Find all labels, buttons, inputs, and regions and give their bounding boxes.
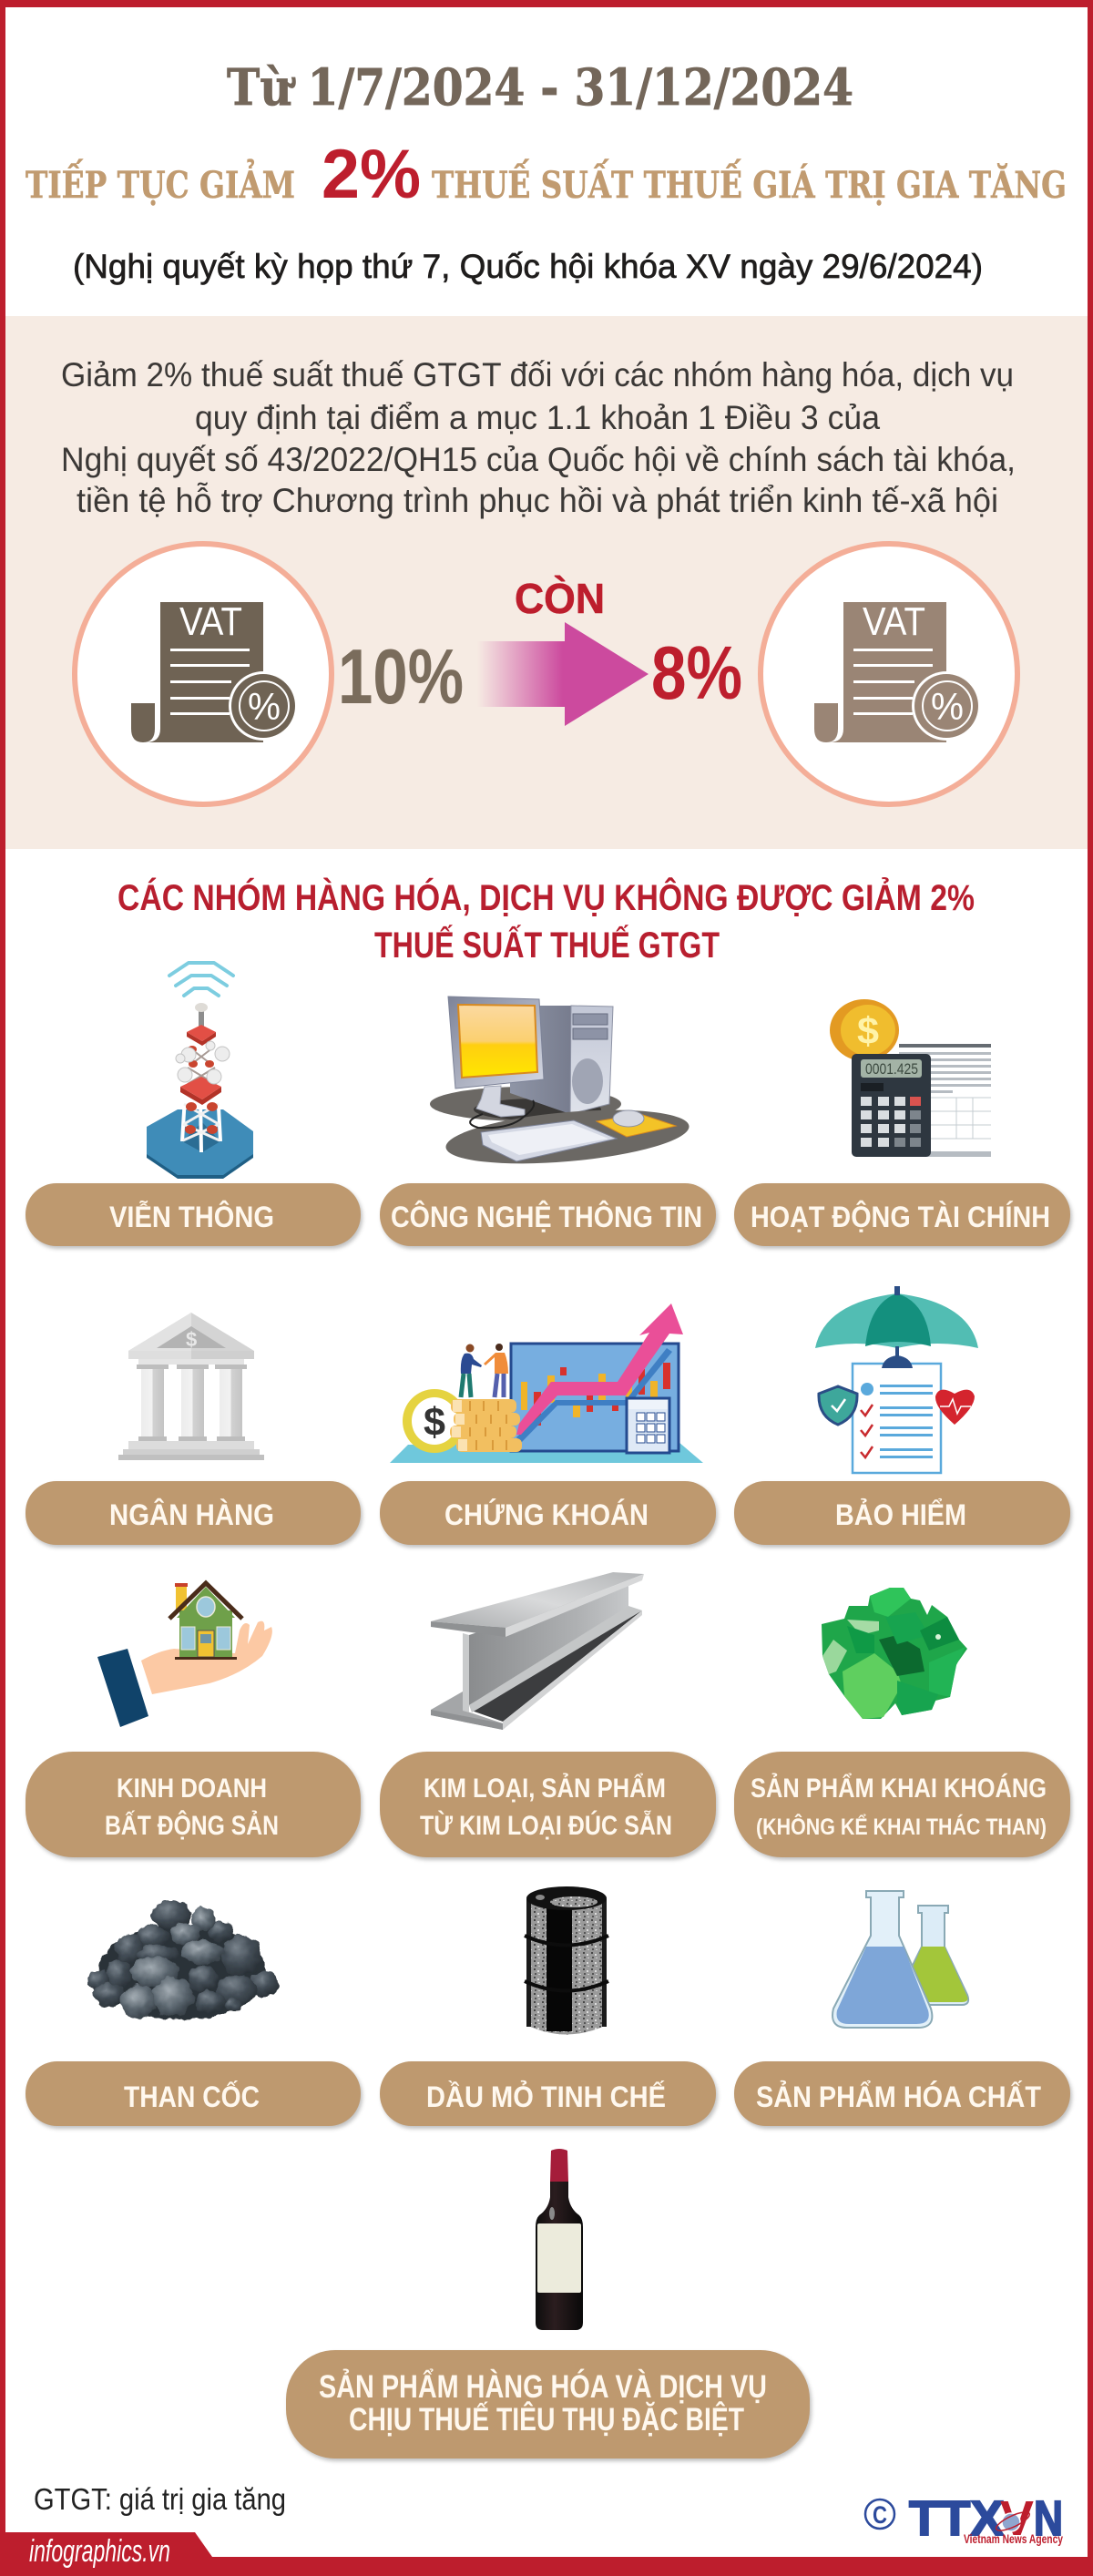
label: special consumption tax: SẢN PHẨM HÀNG HÓA VÀ DỊCH VỤ bbox=[319, 2368, 767, 2405]
footer site name: infographics.vn bbox=[29, 2534, 170, 2569]
heading: excluded groups bbox=[117, 876, 975, 966]
logo: TTXVN: N bbox=[1034, 2491, 1063, 2546]
description text: quy định tại điểm a mục 1.1 khoản 1 Điều 3 của bbox=[195, 399, 880, 436]
subtitle bbox=[26, 136, 1067, 213]
label: special consumption tax bbox=[286, 2350, 812, 2461]
footnote: GTGT: giá trị gia tăng bbox=[34, 2482, 286, 2516]
title: date range: Từ 1/7/2024 - 31/12/2024 bbox=[227, 57, 853, 117]
icon: VAT document 8%: % bbox=[931, 685, 964, 728]
icon: telecom tower bbox=[147, 963, 253, 1179]
description text bbox=[61, 356, 1016, 519]
resolution reference: (Nghị quyết kỳ họp thứ 7, Quốc hội khóa XV ngày 29/6/2024) bbox=[73, 248, 983, 285]
subtitle: 2% bbox=[322, 136, 421, 213]
label: coke bbox=[26, 2061, 363, 2129]
icon: computer bbox=[430, 997, 691, 1172]
icon: VAT document 8% bbox=[761, 544, 1017, 804]
label: mining products: SẢN PHẨM KHAI KHOÁNG bbox=[751, 1773, 1047, 1804]
label: refined oil: DẦU MỎ TINH CHẾ bbox=[426, 2080, 666, 2113]
label: banking: NGÂN HÀNG bbox=[109, 1498, 274, 1531]
icon: calculator and coin: 0001.425 bbox=[865, 1060, 918, 1078]
value: 8%: 8% bbox=[651, 630, 742, 715]
icon: oil barrel bbox=[525, 1886, 608, 2035]
label: real estate bbox=[26, 1752, 363, 1860]
label: telecom: VIỄN THÔNG bbox=[109, 1201, 274, 1233]
icon: wine bottle bbox=[536, 2149, 583, 2330]
icon: bank bbox=[118, 1313, 264, 1460]
label: real estate: KINH DOANH bbox=[117, 1774, 267, 1804]
label: metals bbox=[380, 1752, 718, 1860]
label: insurance bbox=[734, 1481, 1072, 1548]
value: 10%: 10% bbox=[338, 634, 464, 721]
icon: steel beam bbox=[431, 1572, 644, 1730]
icon: VAT document 8%: VAT bbox=[863, 599, 925, 644]
label: metals: KIM LOẠI, SẢN PHẨM bbox=[424, 1773, 666, 1804]
label: finance: HOẠT ĐỘNG TÀI CHÍNH bbox=[751, 1201, 1050, 1233]
label: insurance: BẢO HIỂM bbox=[835, 1498, 966, 1531]
logo: TTXVN: V bbox=[1000, 2491, 1034, 2546]
footer bar bbox=[0, 2532, 1093, 2576]
icon: green mineral bbox=[822, 1588, 967, 1719]
logo: TTXVN: TTX bbox=[909, 2491, 1004, 2546]
label: chemicals: SẢN PHẨM HÓA CHẤT bbox=[756, 2080, 1041, 2113]
label: finance bbox=[734, 1183, 1072, 1249]
label: securities bbox=[380, 1481, 718, 1548]
label: IT bbox=[380, 1183, 718, 1249]
icon: stock chart bbox=[390, 1303, 703, 1463]
label: mining products: (KHÔNG KỂ KHAI THÁC THAN) bbox=[756, 1813, 1047, 1840]
icon: VAT document 10% bbox=[75, 544, 332, 804]
arrow bbox=[477, 622, 649, 726]
label: IT: CÔNG NGHỆ THÔNG TIN bbox=[391, 1201, 702, 1233]
label: telecom bbox=[26, 1183, 363, 1249]
icon: chemical flasks bbox=[833, 1891, 968, 2028]
label: securities: CHỨNG KHOÁN bbox=[444, 1498, 649, 1531]
label: chemicals bbox=[734, 2061, 1072, 2129]
panel: VAT reduction bbox=[5, 316, 1088, 849]
icon: bank: $ bbox=[186, 1328, 197, 1351]
icon: coke pile bbox=[87, 1900, 278, 2019]
icon: calculator and coin bbox=[830, 999, 991, 1157]
label: mining products bbox=[734, 1752, 1072, 1860]
icon: stock chart: $ bbox=[424, 1400, 445, 1445]
description text: tiền tệ hỗ trợ Chương trình phục hồi và phát triển kinh tế-xã hội bbox=[77, 482, 998, 519]
subtitle: TIẾP TỤC GIẢM bbox=[26, 159, 295, 207]
description text: Giảm 2% thuế suất thuế GTGT đối với các nhóm hàng hóa, dịch vụ bbox=[61, 356, 1014, 394]
icon: house in hand bbox=[97, 1583, 272, 1727]
label: coke: THAN CỐC bbox=[124, 2080, 260, 2113]
label: real estate: BẤT ĐỘNG SẢN bbox=[105, 1810, 279, 1841]
icon: VAT document 10%: % bbox=[248, 685, 281, 728]
label: special consumption tax: CHỊU THUẾ TIÊU THỤ ĐẶC BIỆT bbox=[349, 2401, 744, 2438]
label: refined oil bbox=[380, 2061, 718, 2129]
icon: calculator and coin: $ bbox=[857, 1009, 879, 1052]
heading: excluded groups: THUẾ SUẤT THUẾ GTGT bbox=[374, 924, 720, 966]
icon: insurance bbox=[815, 1286, 978, 1473]
description text: Nghị quyết số 43/2022/QH15 của Quốc hội về chính sách tài khóa, bbox=[61, 441, 1016, 478]
label: banking bbox=[26, 1481, 363, 1548]
logo: TTXVN bbox=[865, 2491, 1063, 2546]
label: CÒN: CÒN bbox=[515, 575, 605, 622]
logo: TTXVN: C bbox=[873, 2501, 887, 2529]
label: metals: TỪ KIM LOẠI ĐÚC SẴN bbox=[420, 1809, 672, 1841]
icon: VAT document 10%: VAT bbox=[179, 599, 242, 644]
